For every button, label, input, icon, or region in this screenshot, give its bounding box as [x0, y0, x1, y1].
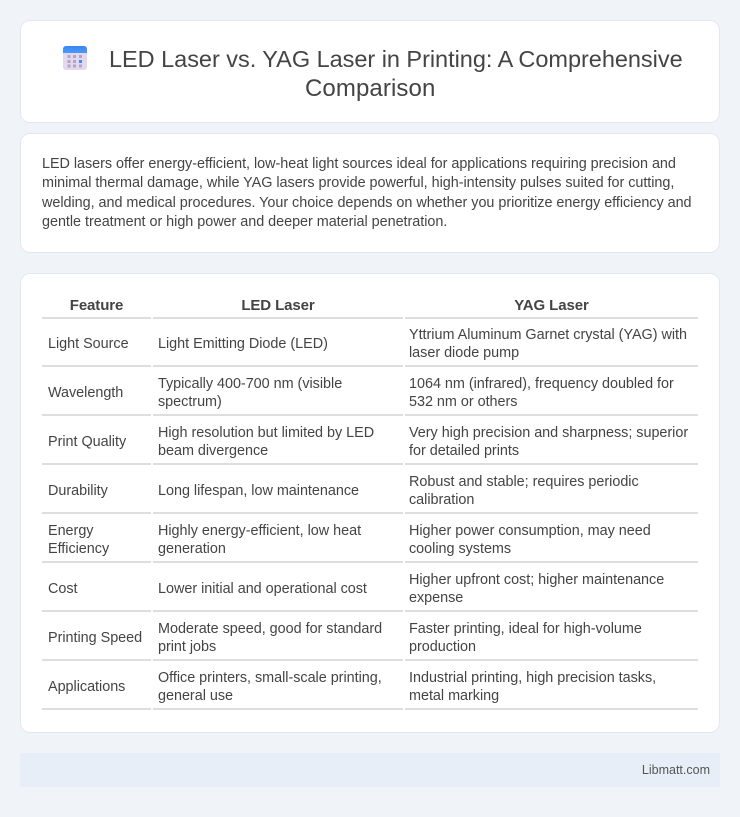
row: Printing Speed: Faster printing, ideal for high-volume — [409, 621, 642, 637]
table header row: YAG Laser — [514, 297, 589, 314]
table header row — [42, 297, 698, 319]
row: Cost: Cost — [48, 581, 78, 597]
row: Printing Speed: production — [409, 639, 476, 655]
footer credit: Libmatt.com — [642, 763, 710, 777]
row: Durability: Long lifespan, low maintenance — [158, 483, 359, 499]
row: Printing Speed: Printing Speed — [48, 630, 142, 646]
row: Print Quality: beam divergence — [158, 443, 268, 459]
row: Print Quality: High resolution but limited by LED — [158, 425, 374, 441]
title — [109, 46, 683, 102]
row: Cost — [42, 572, 698, 612]
row: Printing Speed: print jobs — [158, 639, 216, 655]
row: Durability: Durability — [48, 483, 108, 499]
row: Printing Speed — [42, 621, 698, 661]
row: Light Source — [42, 327, 698, 367]
row: Printing Speed: Moderate speed, good for standard — [158, 621, 382, 637]
row: Wavelength: Wavelength — [48, 385, 123, 401]
summary text: gentle treatment or high power and deeper material penetration. — [42, 214, 447, 230]
row: Cost: Higher upfront cost; higher maintenance — [409, 572, 664, 588]
summary text — [42, 156, 692, 230]
row: Energy Efficiency: Highly energy-efficient, low heat — [158, 523, 361, 539]
row: Light Source: Light Source — [48, 336, 129, 352]
row: Energy Efficiency: Higher power consumption, may need — [409, 523, 651, 539]
row: Light Source: Yttrium Aluminum Garnet crystal (YAG) with — [409, 327, 687, 343]
title: Comparison — [305, 75, 435, 102]
row: Light Source: Light Emitting Diode (LED) — [158, 336, 328, 352]
row: Print Quality: Print Quality — [48, 434, 126, 450]
row: Durability: calibration — [409, 492, 474, 508]
row: Applications: Office printers, small-scale printing, — [158, 670, 382, 686]
row: Energy Efficiency — [42, 523, 698, 563]
row: Cost: Lower initial and operational cost — [158, 581, 367, 597]
row: Durability: Robust and stable; requires periodic — [409, 474, 639, 490]
row: Applications: metal marking — [409, 688, 499, 704]
row: Energy Efficiency: generation — [158, 541, 226, 557]
title: LED Laser vs. YAG Laser in Printing: A Comprehensive — [109, 46, 683, 72]
icon: calendar — [63, 46, 87, 70]
table header row: LED Laser — [241, 297, 315, 314]
row: Light Source: laser diode pump — [409, 345, 519, 361]
table header row: Feature — [70, 297, 123, 314]
row: Energy Efficiency: Energy — [48, 523, 93, 539]
row: Print Quality — [42, 425, 698, 465]
row: Wavelength — [42, 376, 698, 416]
footer bar — [20, 753, 720, 787]
row: Applications: Industrial printing, high precision tasks, — [409, 670, 656, 686]
row: Durability — [42, 474, 698, 514]
row: Print Quality: for detailed prints — [409, 443, 519, 459]
row: Wavelength: 532 nm or others — [409, 394, 517, 410]
row: Energy Efficiency: cooling systems — [409, 541, 511, 557]
row: Applications: Applications — [48, 679, 125, 695]
summary text: minimal thermal damage, while YAG lasers provide powerful, high-intensity pulses suited for cutting, — [42, 175, 674, 191]
summary text: welding, and medical procedures. Your choice depends on whether you prioritize energy efficiency and — [42, 195, 692, 211]
row: Wavelength: spectrum) — [158, 394, 222, 410]
row: Print Quality: Very high precision and sharpness; superior — [409, 425, 688, 441]
summary text: LED lasers offer energy-efficient, low-heat light sources ideal for applications requiring precision and — [42, 156, 676, 172]
panel: comparison table card — [20, 273, 720, 733]
panel: title card — [20, 20, 720, 123]
row: Cost: expense — [409, 590, 463, 606]
row: Energy Efficiency: Efficiency — [48, 541, 109, 557]
panel: summary card — [20, 133, 720, 253]
row: Applications — [42, 670, 698, 710]
row: Wavelength: Typically 400-700 nm (visible — [158, 376, 342, 392]
row: Applications: general use — [158, 688, 233, 704]
row: Wavelength: 1064 nm (infrared), frequency doubled for — [409, 376, 674, 392]
